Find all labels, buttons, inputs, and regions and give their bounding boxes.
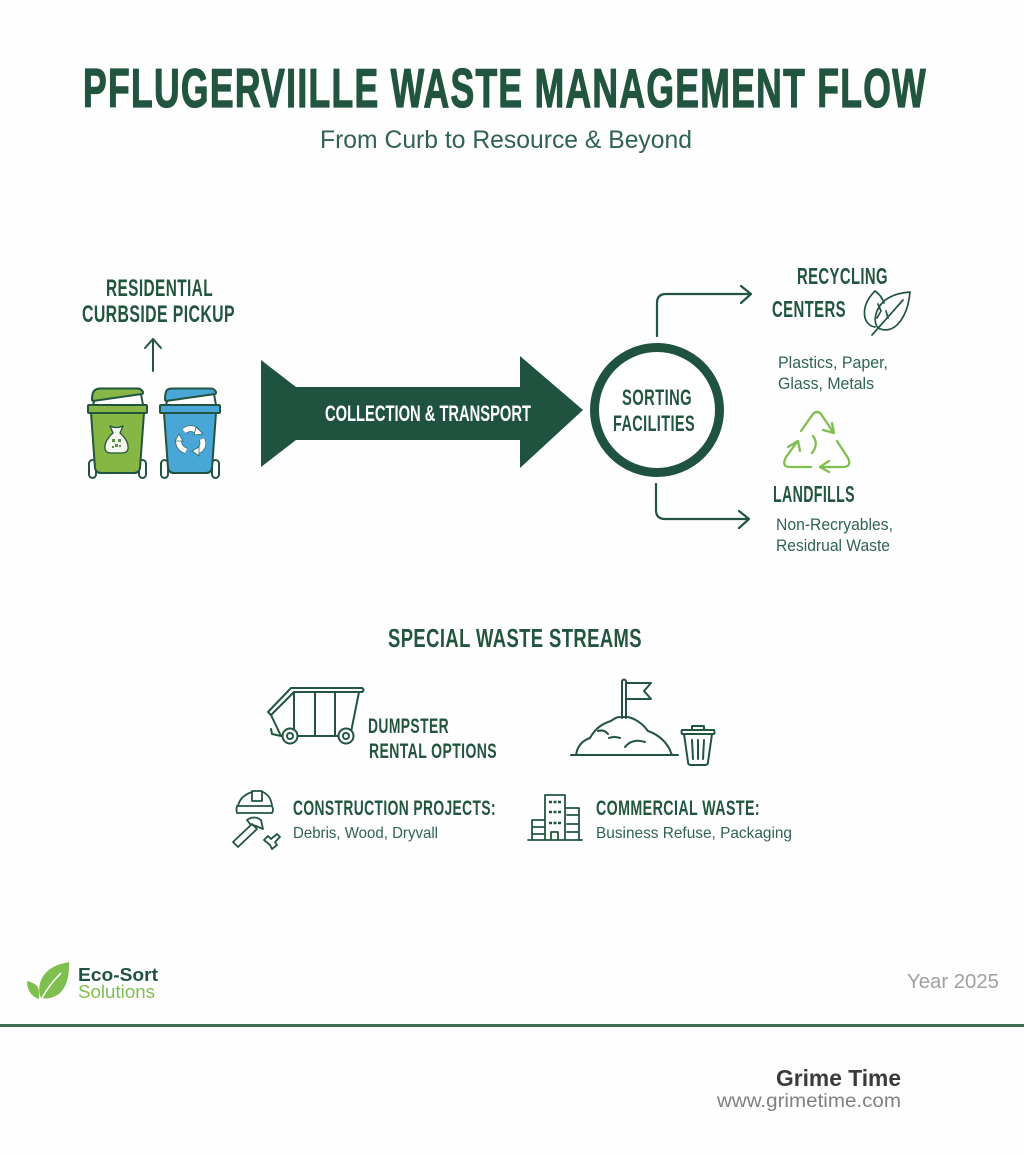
text: recycling materials bbox=[778, 353, 888, 393]
text: commercial waste: Business Refuse, Packaging bbox=[596, 825, 792, 842]
logo: leaf icon bbox=[27, 962, 69, 999]
text: construction projects bbox=[293, 797, 496, 842]
node: sorting facilities: FACILITIES bbox=[613, 411, 695, 436]
text: construction projects: Debris, Wood, Dryvall bbox=[293, 825, 438, 842]
icon: landfill mound with flag bbox=[571, 680, 678, 755]
text: landfill materials: Non-Recryables, bbox=[776, 515, 893, 534]
icon: recycle symbol on bin bbox=[175, 427, 203, 456]
node: sorting facilities bbox=[594, 348, 720, 472]
icon: trash can bbox=[682, 726, 714, 765]
arrow: to landfills bbox=[656, 484, 749, 528]
arrow: up to curbside pickup bbox=[145, 339, 161, 371]
icon: trash bag bbox=[105, 426, 128, 453]
text: dumpster rental options: RENTAL OPTIONS bbox=[369, 740, 497, 763]
heading: residential curbside pickup: CURBSIDE PICKUP bbox=[82, 301, 235, 328]
text: landfill materials: Residrual Waste bbox=[776, 536, 890, 555]
text: dumpster rental options bbox=[368, 715, 497, 763]
arrow: to recycling centers bbox=[657, 286, 751, 336]
icon: leaves bbox=[864, 291, 910, 335]
logo: wordmark: Solutions bbox=[78, 981, 155, 1002]
heading: landfills: LANDFILLS bbox=[773, 481, 855, 507]
heading: recycling centers: CENTERS bbox=[772, 296, 846, 322]
subtitle: From Curb to Resource & Beyond bbox=[320, 126, 692, 154]
text: commercial waste: COMMERCIAL WASTE: bbox=[596, 797, 760, 820]
icon: recycling triangle bbox=[784, 412, 849, 472]
text: recycling materials: Plastics, Paper, bbox=[778, 353, 888, 372]
text: commercial waste bbox=[596, 797, 792, 842]
icon: blue bin bbox=[160, 388, 220, 478]
text: recycling materials: Glass, Metals bbox=[778, 374, 874, 393]
heading: recycling centers: RECYCLING bbox=[797, 263, 888, 289]
text: landfill materials bbox=[776, 515, 893, 555]
icon: hard hat and hammer bbox=[233, 791, 280, 849]
heading: residential curbside pickup bbox=[82, 275, 235, 328]
text: dumpster rental options: DUMPSTER bbox=[368, 715, 449, 738]
arrow: collection and transport: COLLECTION & TRANSPORT bbox=[325, 401, 531, 426]
logo: wordmark: Eco-Sort bbox=[78, 964, 158, 985]
footer: company name and url: www.grimetime.com bbox=[716, 1091, 901, 1112]
footer: company name and url bbox=[716, 1065, 901, 1112]
heading: recycling centers bbox=[772, 263, 888, 322]
icon: green bin bbox=[88, 388, 147, 478]
icon: dumpster bbox=[268, 688, 364, 744]
text: construction projects: CONSTRUCTION PROJECTS: bbox=[293, 797, 496, 820]
icon: commercial building bbox=[528, 795, 582, 840]
heading: residential curbside pickup: RESIDENTIAL bbox=[106, 275, 213, 302]
footer: company name and url: Grime Time bbox=[776, 1065, 901, 1091]
logo: wordmark bbox=[78, 964, 158, 1002]
arrow: collection and transport bbox=[261, 356, 583, 468]
heading: special waste streams: SPECIAL WASTE STREAMS bbox=[388, 623, 642, 653]
year label: Year 2025 bbox=[907, 971, 999, 993]
node: sorting facilities: SORTING bbox=[622, 385, 692, 410]
